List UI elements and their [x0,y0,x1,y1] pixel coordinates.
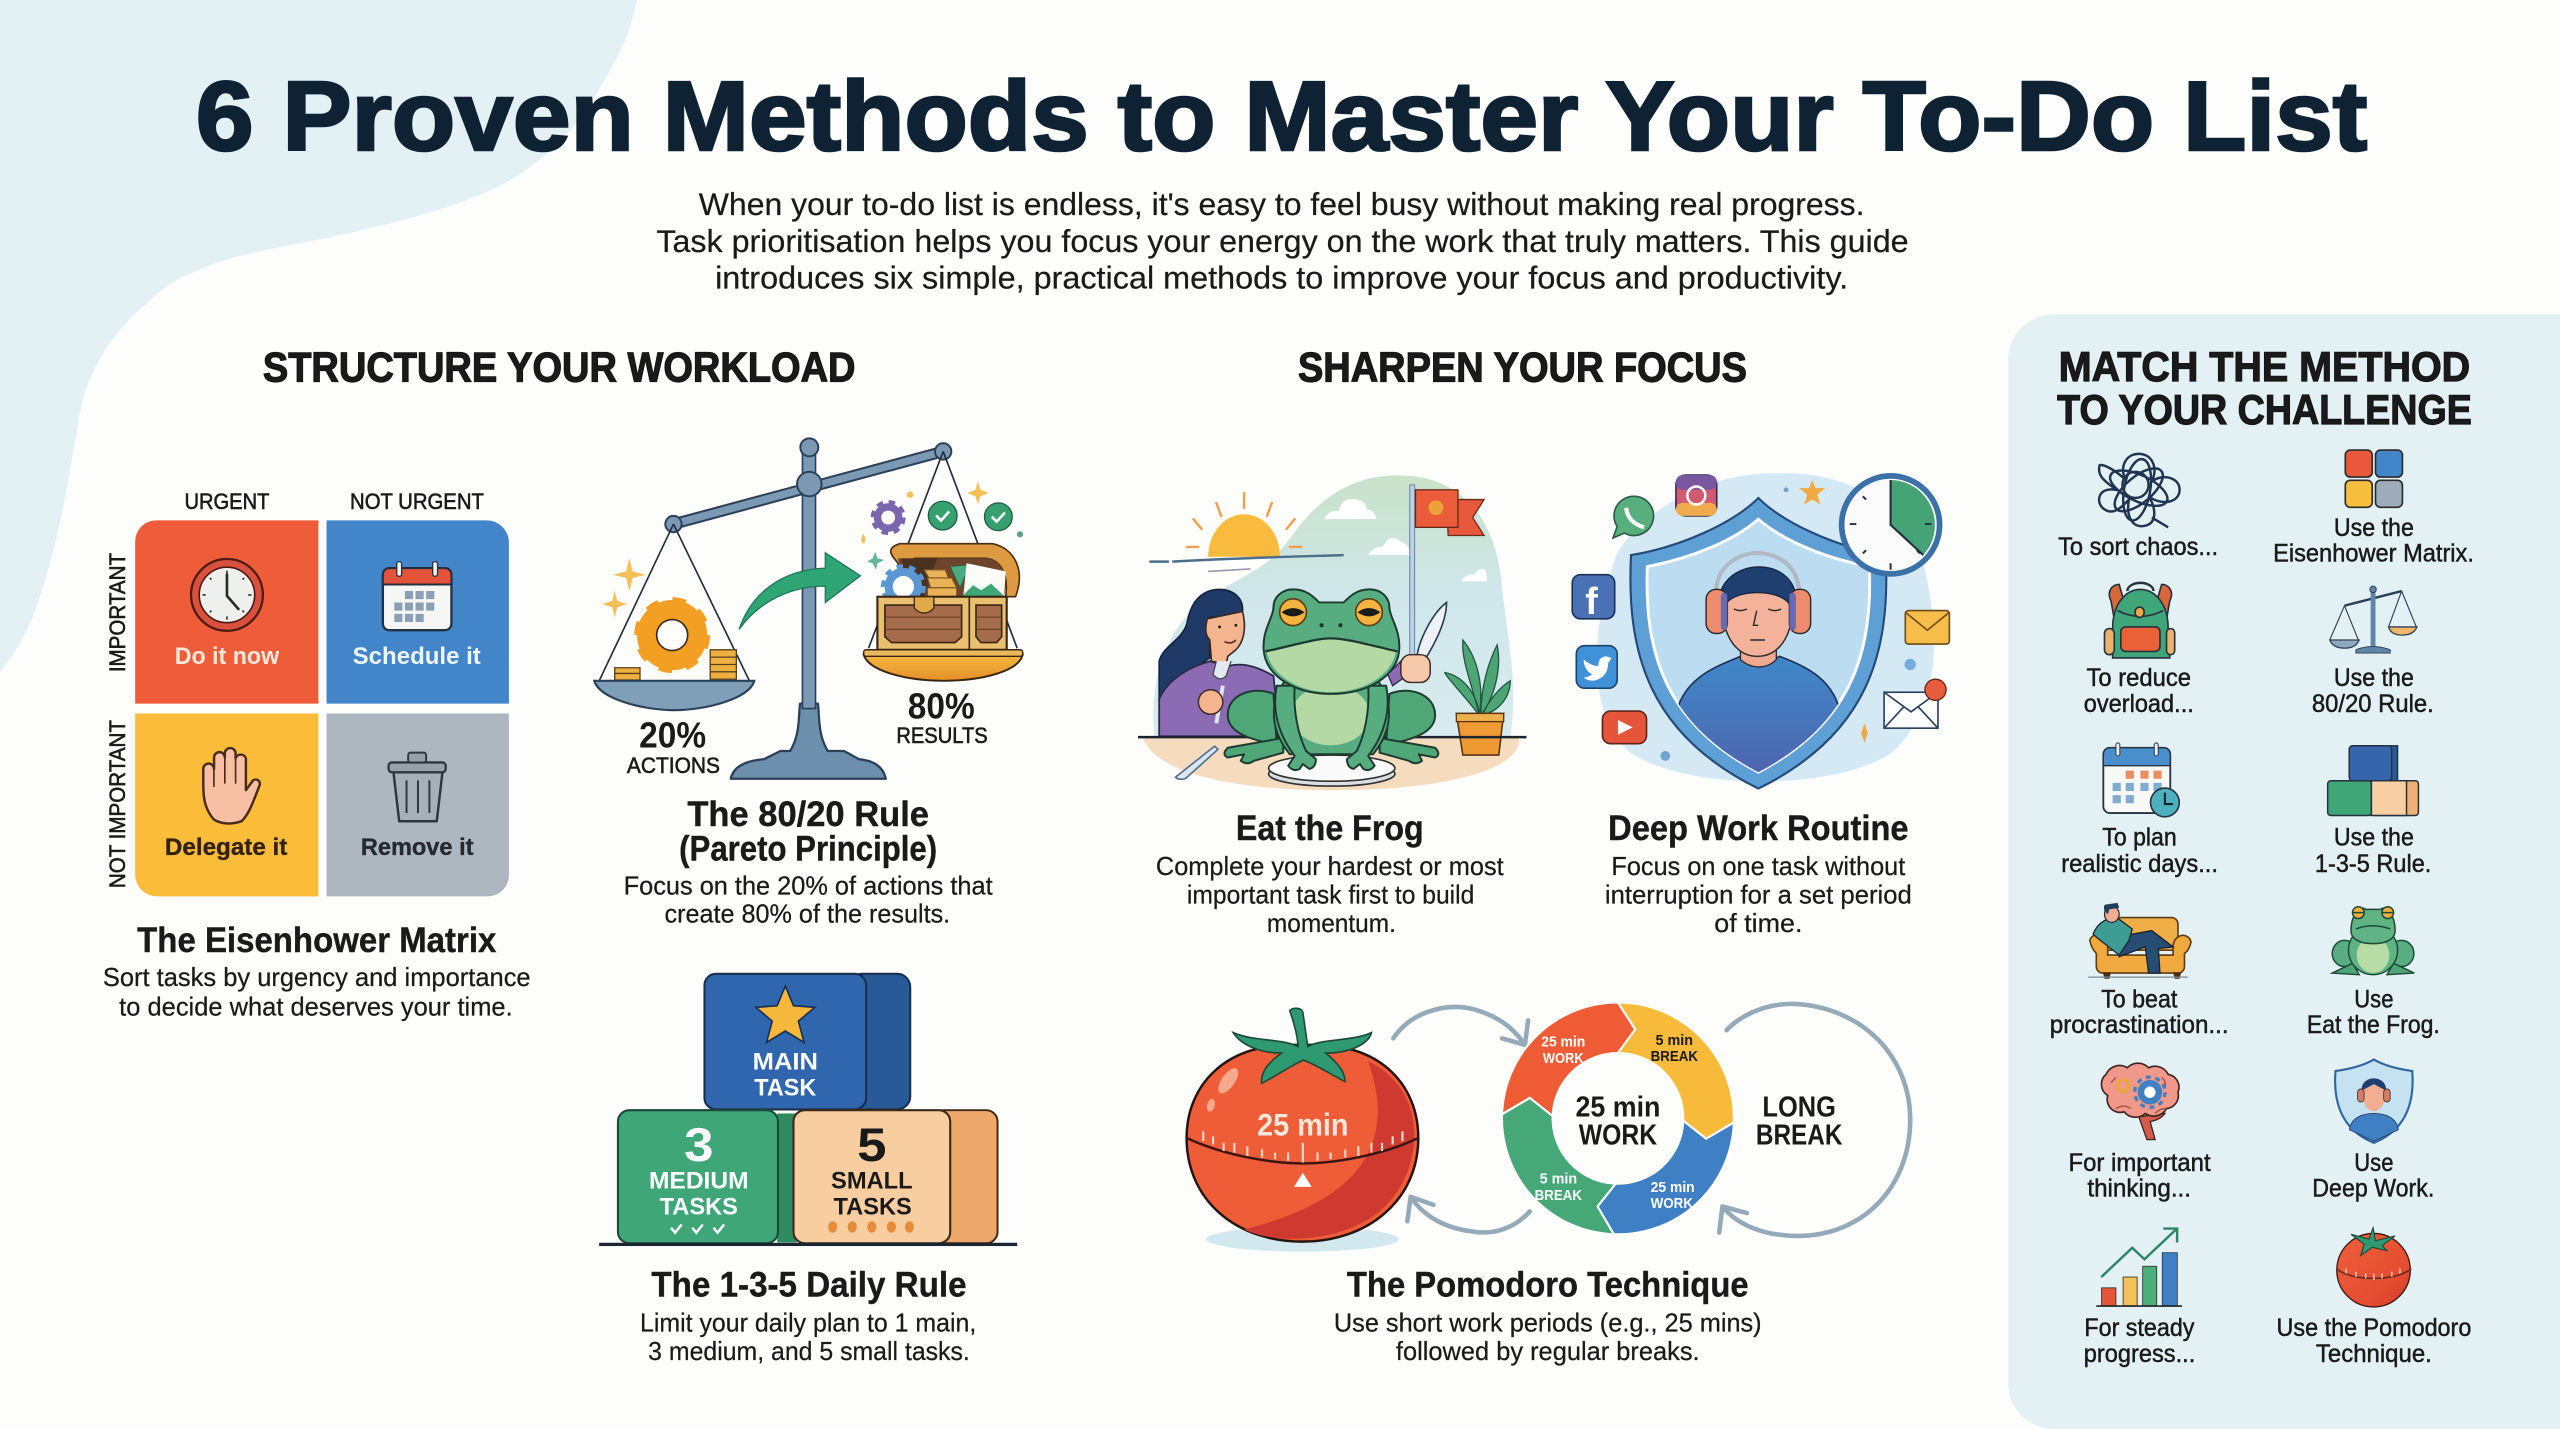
80/20 description: Focus on the 20% of actions that [624,871,993,901]
deep work description [1605,851,1912,938]
text: to plan realistic days: To plan [2102,824,2177,852]
80/20 title: The 80/20 Rule [687,795,929,834]
block: main task: TASK [754,1075,817,1102]
purple gear [873,502,904,533]
block: medium tasks [618,1110,778,1243]
icon: matrix grid [2345,450,2402,507]
quadrant: schedule it [327,520,509,704]
right pan with treasure chest [864,544,1023,681]
intro text: Task prioritisation helps you focus your energy on the work that truly matters. This guide [656,223,1909,259]
text: use the 1-3-5 rule: Use the [2334,824,2414,852]
block: small tasks: 5 [857,1119,887,1172]
1-3-5 description: 3 medium, and 5 small tasks. [648,1336,970,1366]
panel heading: TO YOUR CHALLENGE [2057,386,2472,433]
intro text [656,186,1909,295]
80/20 title [679,795,937,868]
chart: pomodoro cycle ring [1502,1002,1734,1234]
1-3-5 title: The 1-3-5 Daily Rule [651,1265,967,1304]
icon: small shield [2335,1060,2413,1143]
ring centre label: WORK [1579,1119,1657,1151]
text: for steady progress: For steady [2084,1314,2195,1342]
80% results label: RESULTS [896,723,988,748]
text: to sort chaos: To sort chaos... [2058,533,2218,561]
heading: sharpen your focus: SHARPEN YOUR FOCUS [1298,344,1747,391]
block: medium tasks: 3 [684,1119,713,1172]
shield [1630,498,1886,789]
block: medium tasks: TASKS [660,1194,738,1221]
icon: small blocks [2328,746,2418,816]
arrow: tomato to cycle [1393,1007,1528,1045]
matrix column labels: URGENT [184,489,269,514]
text: to plan realistic days [2061,824,2218,878]
quadrant: schedule it: Schedule it [353,644,481,670]
long break label [1756,1092,1843,1151]
matrix description: Sort tasks by urgency and importance [103,962,531,992]
quadrant: delegate it: Delegate it [165,835,287,861]
deep work title: Deep Work Routine [1608,809,1909,848]
quadrant: delegate it [135,713,318,896]
person with headphones [1678,655,1838,772]
illustration: frog scene [1138,475,1527,790]
panel heading: MATCH THE METHOD [2059,343,2470,390]
intro text: introduces six simple, practical methods to improve your focus and productivity. [715,259,1848,295]
panel: the 80/20 rule [594,438,1023,928]
text: to reduce overload: overload... [2084,690,2194,718]
1-3-5 description: Limit your daily plan to 1 main, [640,1307,976,1337]
check badges [867,501,1023,570]
matrix title: The Eisenhower Matrix [137,921,497,960]
icon: small tomato [2336,1228,2411,1307]
80/20 description [624,871,993,928]
text: use the 80/20 rule: 80/20 Rule. [2312,690,2434,718]
arrow: cycle to tomato [1407,1197,1530,1232]
text: use deep work: Deep Work. [2312,1175,2434,1203]
block: main task: MAIN [753,1048,818,1075]
star and dots [1660,480,1916,761]
heading: structure your workload: STRUCTURE YOUR WORKLOAD [263,344,856,391]
arrow: green growth arrow [739,553,860,629]
background blob [0,0,637,673]
matrix row labels: NOT IMPORTANT [105,720,130,888]
flag [1410,485,1484,661]
table edge [1138,736,1527,738]
plate [1269,755,1395,786]
plant [1445,640,1510,755]
frog title: Eat the Frog [1236,809,1424,848]
icon: calendar with clock [2103,743,2179,817]
panel: match the method to your challenge [2008,314,2560,1429]
ring segment labels: BREAK [1535,1188,1582,1204]
matrix row labels: IMPORTANT [105,553,130,672]
frog [1224,589,1438,770]
icon: instagram [1676,475,1717,516]
ring centre label [1576,1092,1660,1151]
text: use the 1-3-5 rule [2315,824,2431,878]
text: use the pomodoro technique: Use the Pomodoro [2277,1314,2471,1342]
80% results label [896,685,988,748]
illustration: tomato timer [1187,1008,1418,1252]
ring centre label: 25 min [1576,1092,1660,1124]
icon: facebook [1572,575,1615,622]
text: use the pomodoro technique: Technique. [2316,1340,2432,1368]
quadrant: remove it [327,713,509,896]
clock [1842,476,1940,574]
arrow: long break loop [1719,1004,1910,1236]
panel: eat the frog [1138,475,1527,938]
deep work description: Focus on one task without [1611,851,1906,881]
table knife [1176,746,1218,779]
icon: facebook: f [1585,580,1598,622]
long break label: BREAK [1756,1119,1843,1151]
icon: growth chart [2096,1229,2182,1306]
80% results label: 80% [908,685,975,726]
icon: twitter [1576,646,1617,688]
text: for important thinking: For important [2069,1149,2211,1177]
frog description: momentum. [1267,908,1396,938]
icon: tangle [2099,454,2180,527]
ring segment labels: 5 min [1656,1033,1693,1049]
text: for steady progress: progress... [2084,1340,2195,1368]
ring segment labels [1535,1033,1698,1212]
block: main task [704,974,910,1109]
matrix column labels: NOT URGENT [350,489,484,514]
text: use the Eisenhower Matrix: Eisenhower Matrix. [2273,540,2474,568]
panel heading [2057,343,2472,433]
left pan with gear and coins [594,601,754,710]
sun [1149,493,1344,571]
matrix column labels [184,489,484,514]
matrix row labels [105,553,130,888]
panel: the Eisenhower Matrix [103,489,531,1022]
icon: brain with gears [2101,1063,2179,1140]
panel: deep work routine [1572,473,1949,938]
ring segment labels: 5 min [1540,1172,1577,1188]
text: use the Eisenhower Matrix [2273,514,2474,568]
block: small tasks: TASKS [833,1194,912,1221]
text: use eat the frog: Eat the Frog. [2307,1011,2440,1039]
text: to beat procrastination [2050,985,2229,1039]
icon: yellow mail [1905,611,1949,644]
knife in hand [1388,602,1447,686]
matrix description: to decide what deserves your time. [119,992,513,1022]
ring segment labels: 25 min [1541,1035,1585,1051]
deep work description: interruption for a set period [1605,880,1912,910]
chest body [877,597,1007,650]
title: 6 Proven Methods to Master Your To-Do List [196,61,2367,171]
text: for steady progress [2084,1314,2195,1368]
text: use deep work: Use [2354,1149,2393,1177]
deep work description: of time. [1714,908,1802,938]
panel: the 1-3-5 daily rule [599,974,1017,1366]
pomodoro title: The Pomodoro Technique [1347,1265,1749,1304]
quadrant: do it now [135,520,318,704]
text: use the Eisenhower Matrix: Use the [2334,514,2414,542]
block: small tasks: SMALL [831,1168,913,1195]
woman with fork [1159,589,1280,736]
pan [864,655,1023,681]
quadrant: do it now: Do it now [175,644,280,670]
ring segment labels: 25 min [1651,1180,1695,1196]
text: use the 80/20 rule [2312,664,2434,718]
text: for important thinking [2069,1149,2211,1203]
ring segment labels: WORK [1651,1196,1693,1212]
pomodoro description: Use short work periods (e.g., 25 mins) [1334,1307,1762,1337]
sparkles [602,482,989,617]
icon: whatsapp [1613,496,1654,538]
icon: white mail with badge [1884,679,1946,728]
icon: youtube [1602,711,1647,744]
clouds [1324,499,1487,581]
illustration: balance scale [594,438,1023,779]
ring segment labels: BREAK [1651,1049,1698,1065]
text: to plan realistic days: realistic days... [2061,850,2218,878]
80/20 description: create 80% of the results. [664,898,950,928]
20% actions label [627,715,720,778]
text: use the 1-3-5 rule: 1-3-5 Rule. [2315,850,2431,878]
text: use the pomodoro technique [2277,1314,2471,1368]
text: to reduce overload: To reduce [2087,664,2191,692]
chest contents [889,572,918,601]
icon: small frog [2332,907,2414,975]
icon: person on sofa [2088,903,2191,979]
frog description: Complete your hardest or most [1156,851,1504,881]
matrix description [103,962,531,1022]
text: to beat procrastination: procrastination... [2050,1011,2229,1039]
illustration: stacked blocks [599,974,1017,1246]
icon: backpack [2104,583,2175,658]
20% actions label: 20% [639,715,706,756]
intro text: When your to-do list is endless, it's easy to feel busy without making real progress. [699,186,1864,222]
text: to reduce overload [2084,664,2194,718]
text: use the 80/20 rule: Use the [2334,664,2414,692]
text: use eat the frog: Use [2354,985,2393,1013]
frog description: important task first to build [1187,880,1474,910]
illustration: shield and distractions [1572,473,1949,789]
text: use deep work [2312,1149,2434,1203]
icon: small scales [2330,586,2417,653]
1-3-5 description [640,1307,976,1366]
text: use eat the frog [2307,985,2440,1039]
ring segment labels: WORK [1543,1051,1584,1067]
panel: the pomodoro technique [1187,1002,1910,1366]
text: for important thinking: thinking... [2087,1175,2191,1203]
quadrant: remove it: Remove it [361,835,474,861]
chest lid [891,544,1019,597]
block: small tasks [793,1110,998,1243]
pomodoro description [1334,1307,1762,1366]
pomodoro description: followed by regular breaks. [1396,1336,1700,1366]
20% actions label: ACTIONS [627,753,720,778]
text: to beat procrastination: To beat [2101,985,2177,1013]
frog description [1156,851,1504,938]
block: medium tasks: MEDIUM [649,1168,749,1195]
80/20 title: (Pareto Principle) [679,829,937,868]
long break label: LONG [1762,1092,1836,1124]
illustration: tomato timer: 25 min [1257,1108,1349,1143]
